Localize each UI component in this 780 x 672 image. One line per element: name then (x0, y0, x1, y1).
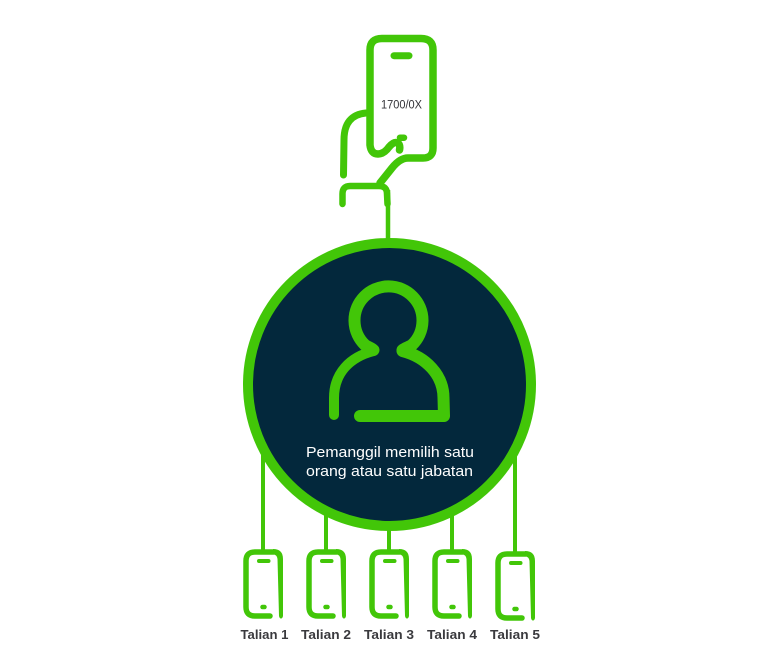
label: Talian 3: Talian 3 (364, 627, 414, 642)
icon: person (334, 286, 444, 416)
phone: line 1 (246, 549, 283, 618)
person body left (334, 351, 374, 415)
connector: line 4 (450, 510, 454, 551)
person body right (360, 351, 444, 416)
phone: line 4 (435, 549, 472, 618)
caption line 2: orang atau satu jabatan (306, 463, 473, 480)
hand fingers (344, 113, 366, 175)
phone number: 1700/0X (381, 100, 422, 112)
phone: line 2 (309, 549, 346, 618)
hand cuff (342, 186, 388, 204)
caption line 1: Pemanggil memilih satu (306, 444, 474, 461)
phone: line 5 (498, 551, 535, 620)
phone button (400, 134, 404, 141)
connector: hand to circle (386, 190, 390, 242)
connector: line 3 (387, 525, 391, 551)
connector: line 1 (261, 450, 265, 551)
panel: central circle (248, 243, 531, 526)
icon: hand holding phone (342, 38, 433, 204)
label: Talian 2: Talian 2 (301, 627, 351, 642)
connector: line 5 (513, 450, 517, 553)
label: Talian 4: Talian 4 (427, 627, 478, 642)
caption (306, 444, 474, 480)
phone: line 3 (372, 549, 409, 618)
person head (354, 286, 423, 350)
phone body (370, 38, 433, 183)
labels (240, 627, 540, 642)
connector: line 2 (324, 510, 328, 551)
label: Talian 1: Talian 1 (240, 627, 288, 642)
label: Talian 5: Talian 5 (490, 627, 540, 642)
phone speaker (394, 52, 409, 59)
